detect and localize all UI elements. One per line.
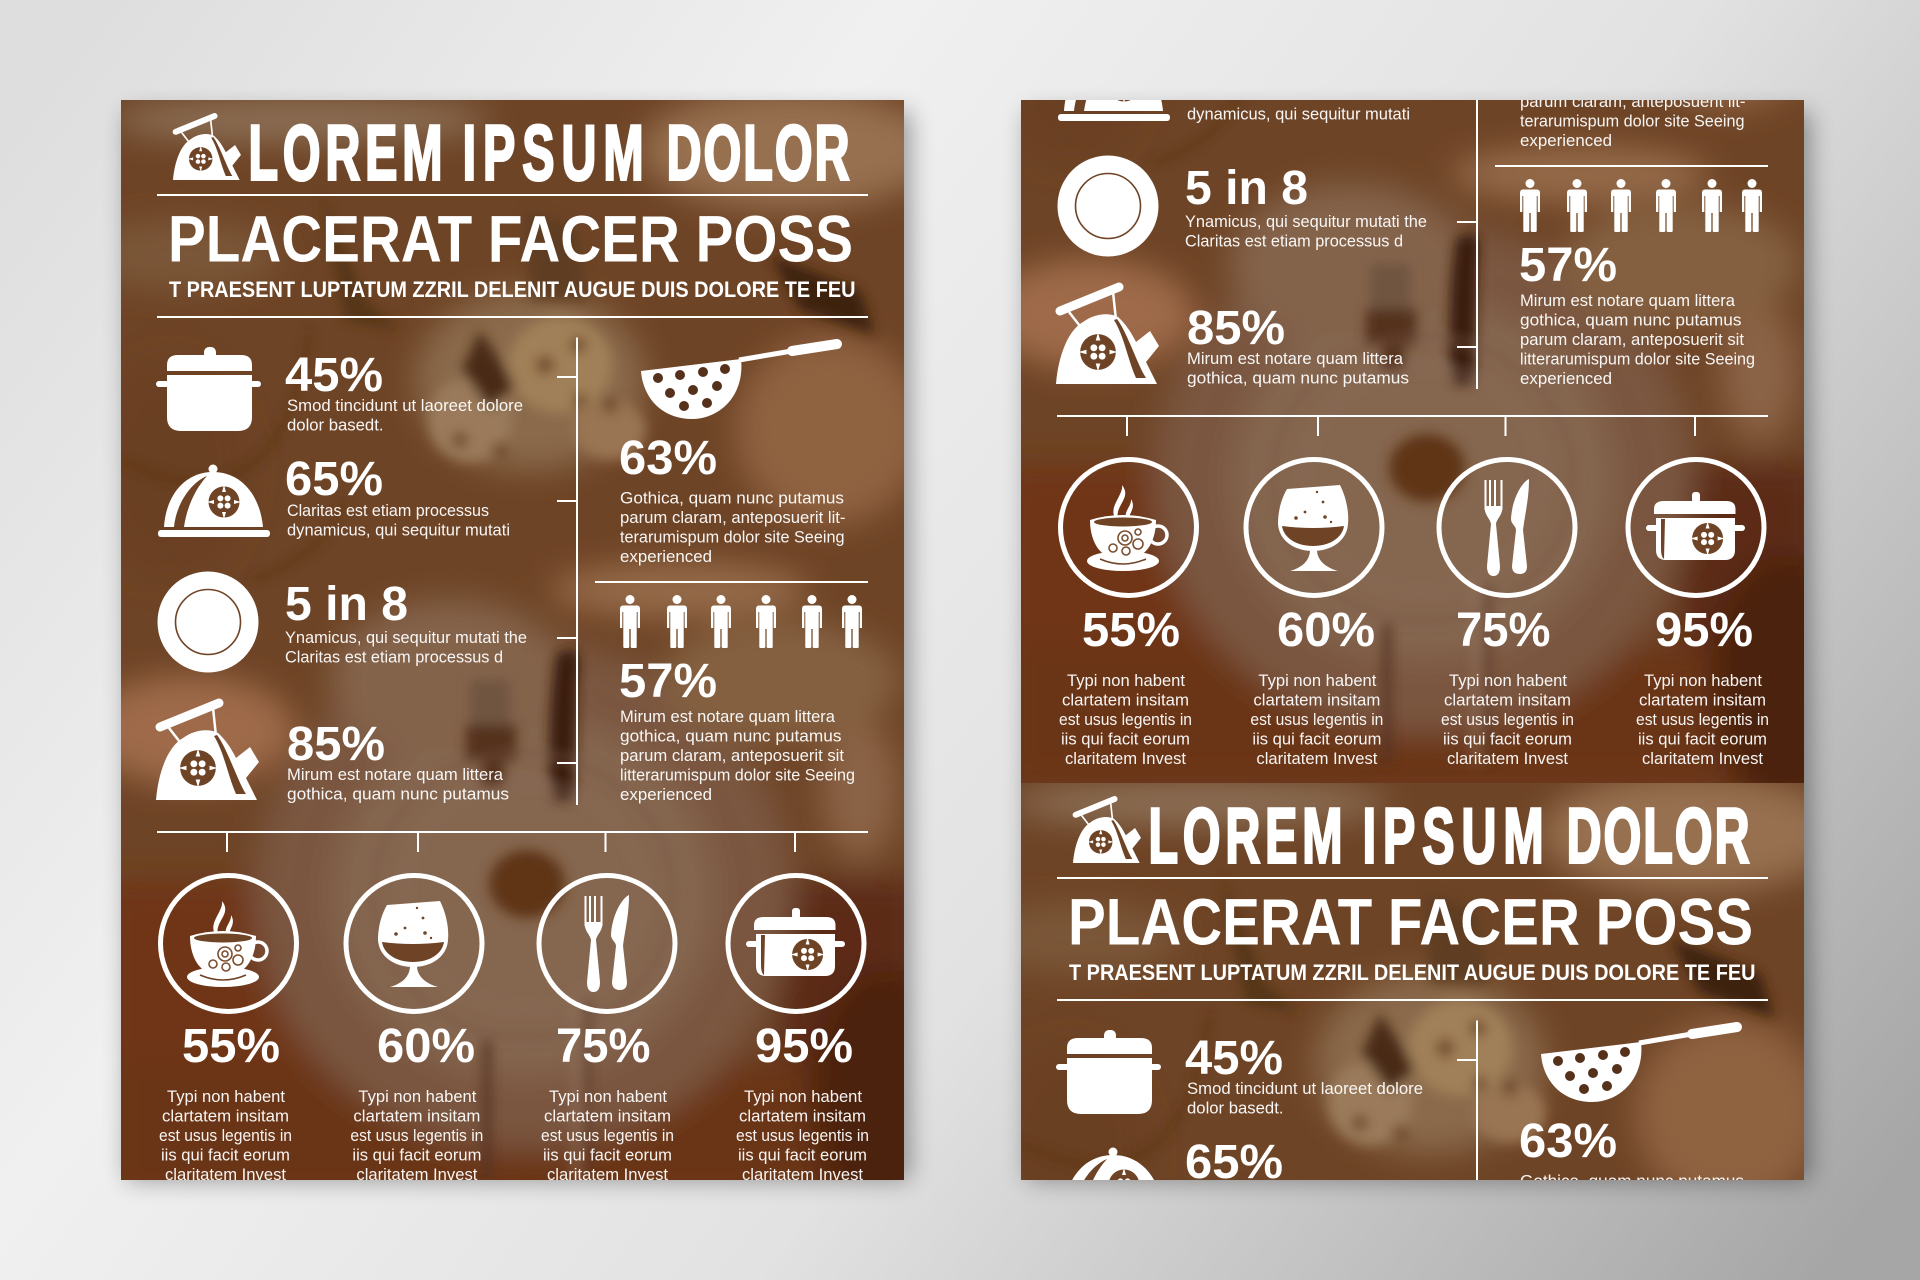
column: 95%: iis qui facit eorum	[738, 1146, 867, 1164]
stat: 63%: experienced	[620, 547, 712, 566]
column: 75%: iis qui facit eorum	[543, 1146, 672, 1164]
tagline: T PRAESENT LUPTATUM ZZRIL DELENIT AUGUE DUIS DOLORE TE FEU	[169, 277, 856, 302]
column: 60%: Typi non habent	[358, 1087, 477, 1106]
column: 55%: 55%	[1082, 604, 1180, 657]
stat: 85%: gothica, quam nunc putamus	[1187, 368, 1409, 388]
stat: 57%: gothica, quam nunc putamus	[1520, 310, 1742, 330]
stat: 45%: dolor basedt.	[1187, 1098, 1284, 1118]
stat: 63%: parum claram, anteposuerit lit-	[620, 508, 846, 527]
stat: 45%: dolor basedt.	[287, 416, 384, 434]
clipped text: 63% description	[1520, 92, 1746, 150]
stat: 65% clipped: 65%	[1185, 1136, 1283, 1189]
column: 60%: est usus legentis in	[350, 1126, 483, 1145]
header rule	[1057, 877, 1768, 879]
clipped text: 63% description: terarumispum dolor site Seeing	[1520, 112, 1744, 130]
stat: 63% clipped: Gothica, quam nunc putamus	[1520, 1172, 1744, 1190]
stat: 5 in 8: Ynamicus, qui sequitur mutati the	[285, 628, 527, 647]
column: 95%: clartatem insitam	[1639, 690, 1766, 710]
stat: 63%: Gothica, quam nunc putamus	[620, 488, 844, 508]
column: 55%: Typi non habent	[167, 1087, 285, 1106]
column: 60%	[346, 876, 483, 1184]
clipped text: 65% description: dynamicus, qui sequitur mutati	[1187, 104, 1410, 124]
column: 95%	[728, 876, 869, 1184]
column: 95%: claritatem Invest	[742, 1165, 863, 1184]
stat: 65%: Claritas est etiam processus	[287, 501, 489, 520]
column: 60%: iis qui facit eorum	[352, 1146, 481, 1164]
stat: 57%: Mirum est notare quam littera	[1520, 291, 1736, 310]
stat: 57%: experienced	[1520, 369, 1612, 388]
stat: 5 in 8: 5 in 8	[1185, 162, 1308, 215]
stat: 57%	[619, 595, 862, 804]
column: 95%: est usus legentis in	[1636, 710, 1769, 729]
tagline: T PRAESENT LUPTATUM ZZRIL DELENIT AUGUE DUIS DOLORE TE FEU	[1069, 960, 1756, 985]
stat: 5 in 8: Claritas est etiam processus d	[1185, 232, 1403, 250]
panel shadow: left	[127, 112, 910, 1180]
column: 95%: 95%	[1655, 604, 1753, 657]
stat: 57%	[1519, 179, 1762, 388]
column: 95%: claritatem Invest	[1642, 749, 1763, 768]
title: icon and heading: IPSUM	[463, 109, 644, 196]
title: icon and heading: LOREM	[1148, 792, 1343, 879]
column: 60%: 60%	[377, 1020, 475, 1073]
title: icon and heading	[1073, 792, 1750, 879]
stat: 57%: 57%	[1519, 239, 1617, 292]
stat: 45%: 45%	[285, 349, 383, 402]
stat: 63%	[619, 344, 846, 566]
stat: 85%: gothica, quam nunc putamus	[287, 784, 509, 804]
background photo, upper layer	[980, 0, 1840, 164]
column: 55%: iis qui facit eorum	[161, 1146, 290, 1164]
panel: right poster, continuation of previous page	[980, 0, 1870, 814]
icon: plate	[158, 572, 258, 672]
column: 55%	[159, 876, 296, 1184]
column: 75%: clartatem insitam	[544, 1106, 671, 1126]
icon: fork and knife	[539, 876, 675, 1012]
column: 75%: est usus legentis in	[541, 1126, 674, 1145]
column rule	[595, 581, 868, 583]
stat: 63%: 63%	[619, 432, 717, 485]
column: 60%: Typi non habent	[1258, 671, 1377, 690]
column: 60%: iis qui facit eorum	[1252, 730, 1381, 748]
column: 55%: claritatem Invest	[165, 1165, 286, 1184]
header rule 2	[1057, 999, 1768, 1001]
stat: 85%	[156, 703, 509, 804]
vertical timeline	[557, 338, 577, 805]
stat: 65%: dynamicus, qui sequitur mutati	[287, 520, 510, 540]
column: 95%: est usus legentis in	[736, 1126, 869, 1145]
vertical timeline	[1457, 84, 1477, 389]
column: 75%	[539, 876, 675, 1184]
stat: 5 in 8: Ynamicus, qui sequitur mutati the	[1185, 212, 1427, 231]
column: 75%: Typi non habent	[1449, 671, 1567, 690]
column: 75%: 75%	[556, 1020, 650, 1073]
header rule	[157, 194, 868, 196]
stat: 57%: experienced	[620, 785, 712, 804]
stat: 5 in 8	[1058, 156, 1427, 256]
column: 55%: clartatem insitam	[1062, 690, 1189, 710]
icon: coffee cup	[1060, 460, 1196, 596]
lower rule with ticks	[1057, 416, 1768, 436]
column: 55%: claritatem Invest	[1065, 749, 1186, 768]
column: 95%: Typi non habent	[1644, 671, 1762, 690]
column: 95%	[1628, 460, 1769, 768]
panel: right poster, repeated header	[980, 773, 1840, 1263]
column: 55%: 55%	[182, 1020, 280, 1073]
icon: pot	[1056, 1030, 1161, 1114]
icon: plate	[1058, 156, 1158, 256]
background photo, upper layer	[980, 773, 1840, 1263]
column: 95%: iis qui facit eorum	[1638, 730, 1767, 748]
background photo, lower layer	[985, 0, 1870, 814]
cloche base remnant	[1058, 48, 1170, 121]
title: icon and heading: LOREM	[248, 109, 443, 196]
background photo, lower layer	[121, 100, 904, 1180]
column: 75%: clartatem insitam	[1444, 690, 1571, 710]
column: 95%: clartatem insitam	[739, 1106, 866, 1126]
column: 95%: Typi non habent	[744, 1087, 862, 1106]
stat: 63%: terarumispum dolor site Seeing	[620, 528, 844, 546]
icon: kettle logo	[1073, 799, 1141, 863]
column: 75%: claritatem Invest	[547, 1165, 668, 1184]
icon: wine glass	[346, 876, 482, 1012]
column: 60%: est usus legentis in	[1250, 710, 1383, 729]
stat: 5 in 8: 5 in 8	[285, 578, 408, 631]
stat: 5 in 8	[158, 572, 527, 672]
stat: 45%: Smod tincidunt ut laoreet dolore	[287, 396, 523, 415]
stat: 85%: Mirum est notare quam littera	[1187, 349, 1404, 368]
stat: 85%: 85%	[1187, 302, 1285, 355]
column: 75%	[1439, 460, 1575, 768]
background photo, upper layer	[121, 100, 904, 534]
column: 75%: claritatem Invest	[1447, 749, 1568, 768]
title: icon and heading: DOLOR	[1567, 792, 1749, 879]
panel shadow: right	[1027, 112, 1810, 1180]
column: 95%: 95%	[755, 1020, 853, 1073]
icon: cloche	[158, 464, 270, 537]
stat: 57%: 57%	[619, 655, 717, 708]
title: icon and heading: IPSUM	[1363, 792, 1544, 879]
title: icon and heading: DOLOR	[667, 109, 849, 196]
vertical timeline	[1457, 1020, 1477, 1183]
stat: 85%	[1056, 287, 1409, 388]
stat: 85%: 85%	[287, 718, 385, 771]
icon: cloche	[1058, 1148, 1170, 1220]
clipped text: 63% description: experienced	[1520, 131, 1612, 150]
column: 55%: est usus legentis in	[1059, 710, 1192, 729]
column: 55%: iis qui facit eorum	[1061, 730, 1190, 748]
column: 60%: clartatem insitam	[1253, 690, 1380, 710]
icon: casserole	[1628, 460, 1764, 596]
stat: 45%: 45%	[1185, 1032, 1283, 1085]
stat: 57%: parum claram, anteposuerit sit	[620, 746, 844, 765]
icon: wine glass	[1246, 460, 1382, 596]
column: 55%: est usus legentis in	[159, 1126, 292, 1145]
stat: 45%	[1056, 1030, 1423, 1118]
column: 55%: Typi non habent	[1067, 671, 1185, 690]
header rule 2	[157, 316, 868, 318]
icon: strainer	[641, 344, 837, 419]
stat: 65% clipped	[1058, 1136, 1283, 1220]
stat: 57%: litterarumispum dolor site Seeing	[1520, 350, 1755, 368]
stat: 63% clipped: 63%	[1519, 1115, 1617, 1168]
column: 60%	[1246, 460, 1383, 768]
stat: 45%: Smod tincidunt ut laoreet dolore	[1187, 1079, 1423, 1098]
icon: six people	[620, 595, 862, 648]
background base	[1021, 783, 1804, 1183]
icon: fork and knife	[1439, 460, 1575, 596]
stat: 5 in 8: Claritas est etiam processus d	[285, 648, 503, 666]
stat: 57%: parum claram, anteposuerit sit	[1520, 330, 1744, 349]
subtitle: PLACERAT FACER POSS	[1068, 884, 1753, 958]
icon: casserole	[728, 876, 864, 1012]
stat: 45%	[156, 347, 523, 434]
stat: 57%: Mirum est notare quam littera	[620, 707, 836, 726]
clipped text: 63% description: parum claram, anteposuerit lit-	[1520, 92, 1746, 111]
icon: kettle	[1056, 287, 1159, 384]
icon: strainer	[1541, 1027, 1737, 1102]
title: icon and heading	[172, 113, 850, 182]
icon: pot	[156, 347, 261, 431]
column: 75%: est usus legentis in	[1441, 710, 1574, 729]
column: 60%: 60%	[1277, 604, 1375, 657]
stat: 57%: litterarumispum dolor site Seeing	[620, 766, 855, 784]
icon: coffee cup	[160, 876, 296, 1012]
panel: left poster	[121, 100, 904, 1180]
column: 60%: clartatem insitam	[353, 1106, 480, 1126]
column: 55%: clartatem insitam	[162, 1106, 289, 1126]
stat: 57%: gothica, quam nunc putamus	[620, 726, 842, 746]
column: 60%: claritatem Invest	[356, 1165, 478, 1184]
subtitle: PLACERAT FACER POSS	[168, 202, 853, 276]
stat: 63% clipped	[1519, 1027, 1744, 1190]
column: 55%	[1059, 460, 1196, 768]
column: 75%: Typi non habent	[549, 1087, 667, 1106]
column: 60%: claritatem Invest	[1256, 749, 1378, 768]
icon: kettle	[156, 703, 259, 800]
stat: 85%: Mirum est notare quam littera	[287, 765, 504, 784]
stat: 65%	[158, 461, 509, 539]
column: 75%: 75%	[1456, 604, 1550, 657]
column: 75%: iis qui facit eorum	[1443, 730, 1572, 748]
icon: kettle logo	[173, 116, 241, 180]
icon: six people	[1520, 179, 1762, 232]
column rule	[1495, 165, 1768, 167]
stat: 65%: 65%	[285, 453, 383, 506]
lower rule with ticks	[157, 832, 868, 852]
